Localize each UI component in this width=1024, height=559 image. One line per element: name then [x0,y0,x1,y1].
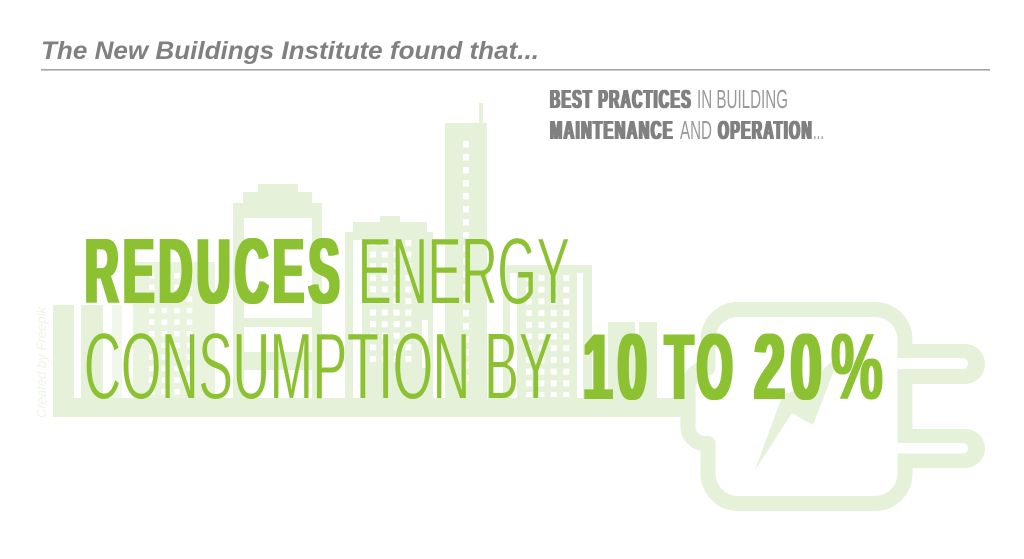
small low buildings [608,322,657,398]
10 to 20 percent [583,314,883,419]
10 to 20 percent: TO [665,314,737,419]
10 to 20 percent: % [831,314,883,419]
intro text: best practices: MAINTENANCE [550,117,674,145]
plug body outline [688,310,905,504]
domed building [233,184,322,398]
skyline illustration [53,103,693,417]
intro text: best practices: OPERATION [718,117,813,145]
10 to 20 percent: 10 [583,314,652,419]
intro text: best practices: BEST PRACTICES [550,86,692,114]
prong channels [890,358,968,454]
plug prongs [890,344,985,468]
building with windows, left [133,262,215,398]
consumption by: CONSUMPTION BY [84,313,553,420]
intro text: best practices [550,86,824,145]
tall tower with spire [445,103,487,398]
icon: electric plug [688,310,985,504]
vertical credit: Created by Freepik [34,306,49,418]
main statement [84,218,883,420]
right building with windows [503,265,592,398]
intro text: best practices: IN BUILDING [697,86,788,114]
intro text: best practices: AND [680,117,712,145]
divider rule [41,69,990,71]
skyline base [53,398,693,417]
reduces: REDUCES [85,219,344,323]
icon: lightning bolt [755,350,842,470]
10 to 20 percent: 20 [754,314,827,419]
left bars [53,305,122,398]
heading: source line: The New Buildings Institute found that... [41,37,539,65]
energy: ENERGY [358,218,570,325]
intro text: best practices: ... [813,117,824,145]
stepped building with windows [345,216,433,398]
